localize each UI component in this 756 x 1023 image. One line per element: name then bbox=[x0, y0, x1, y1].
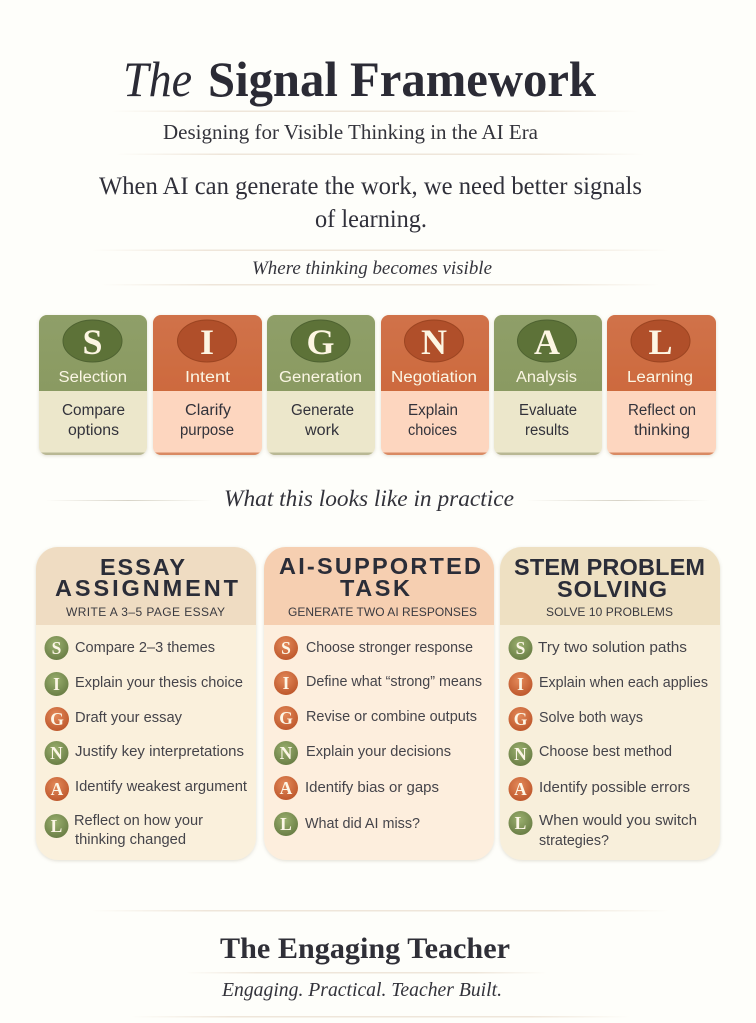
heading: STEM problem solving bbox=[514, 554, 705, 619]
list: AI task steps: G bbox=[279, 708, 293, 728]
list: AI task steps bbox=[274, 636, 482, 836]
title: The bbox=[123, 51, 192, 107]
list: essay steps: N bbox=[50, 743, 63, 763]
heading: STEM problem solving: STEM PROBLEM bbox=[514, 554, 705, 580]
list: AI task steps: Identify bias or gaps bbox=[305, 780, 439, 796]
panel: AI-supported task bbox=[264, 547, 494, 860]
list: STEM steps: When would you switch bbox=[539, 813, 697, 829]
headline statement bbox=[99, 173, 642, 233]
list: AI task steps: I bbox=[283, 673, 290, 693]
list: STEM steps: Solve both ways bbox=[539, 710, 643, 726]
card: Negotiation bbox=[381, 315, 489, 456]
list: STEM steps: L bbox=[515, 813, 526, 833]
headline statement: When AI can generate the work, we need better signals bbox=[99, 173, 642, 200]
heading: AI-supported task: TASK bbox=[340, 575, 410, 601]
heading: AI-supported task: AI-SUPPORTED bbox=[279, 553, 481, 579]
list: AI task steps: Revise or combine outputs bbox=[306, 709, 477, 725]
list: AI task steps: Choose stronger response bbox=[306, 640, 473, 656]
card: Intent bbox=[153, 315, 262, 456]
list: essay steps: Identify weakest argument bbox=[75, 779, 247, 795]
card: Learning: thinking bbox=[634, 422, 690, 439]
title: Signal Framework bbox=[208, 51, 596, 107]
list: STEM steps: Try two solution paths bbox=[538, 640, 687, 656]
card: Selection: Compare bbox=[62, 402, 125, 419]
list: AI task steps: A bbox=[280, 778, 293, 798]
tagline: Where thinking becomes visible bbox=[252, 258, 492, 279]
list: STEM steps: I bbox=[517, 674, 524, 694]
list: STEM steps: Identify possible errors bbox=[539, 780, 690, 796]
card: Selection: S bbox=[82, 322, 103, 362]
list: STEM steps: strategies? bbox=[539, 833, 609, 849]
heading: AI-supported task: GENERATE TWO AI RESPONSES bbox=[288, 605, 477, 619]
heading: essay assignment: WRITE A 3–5 PAGE ESSAY bbox=[66, 605, 225, 619]
list: STEM steps bbox=[508, 636, 708, 849]
list: essay steps: S bbox=[52, 638, 61, 658]
card: Negotiation: Explain bbox=[408, 402, 458, 419]
card: Selection: Selection bbox=[58, 369, 127, 386]
card: Generation bbox=[267, 315, 375, 456]
list: essay steps: Draft your essay bbox=[75, 710, 183, 726]
subtitle: Designing for Visible Thinking in the AI Era bbox=[163, 120, 539, 144]
heading: STEM problem solving: SOLVE 10 PROBLEMS bbox=[546, 605, 673, 619]
card: Generation: work bbox=[304, 422, 339, 439]
panel: essay assignment bbox=[36, 547, 256, 860]
list: AI task steps: S bbox=[281, 638, 291, 658]
list: essay steps bbox=[44, 636, 247, 848]
list: essay steps: I bbox=[53, 674, 60, 694]
card: Generation: Generation bbox=[279, 369, 362, 386]
card: Intent: Clarify bbox=[185, 402, 231, 419]
card: Negotiation: N bbox=[421, 322, 447, 362]
card: Learning: L bbox=[648, 322, 673, 362]
list: AI task steps: What did AI miss? bbox=[305, 816, 420, 832]
card: Analysis bbox=[494, 315, 602, 456]
card: Analysis: Analysis bbox=[516, 369, 577, 386]
list: AI task steps: Define what “strong” means bbox=[306, 674, 482, 690]
section heading: What this looks like in practice bbox=[224, 486, 514, 511]
heading: essay assignment bbox=[55, 554, 239, 619]
list: STEM steps: A bbox=[514, 779, 527, 799]
heading: essay assignment: ASSIGNMENT bbox=[55, 575, 239, 601]
list: STEM steps: S bbox=[516, 638, 525, 658]
footer tagline: Engaging. Practical. Teacher Built. bbox=[221, 979, 502, 1001]
card: Selection bbox=[39, 315, 147, 456]
list: AI task steps: L bbox=[280, 814, 292, 834]
card: Learning bbox=[607, 315, 716, 456]
list: essay steps: L bbox=[51, 816, 62, 836]
list: STEM steps: N bbox=[514, 744, 527, 764]
card: Analysis: Evaluate bbox=[519, 402, 577, 419]
card: Negotiation: choices bbox=[408, 422, 457, 439]
card: Analysis: A bbox=[534, 322, 560, 362]
card: Learning: Reflect on bbox=[628, 402, 696, 419]
card: Learning: Learning bbox=[627, 369, 693, 386]
card: Intent: I bbox=[200, 322, 214, 362]
list: AI task steps: Explain your decisions bbox=[306, 744, 451, 760]
list: essay steps: thinking changed bbox=[75, 832, 186, 848]
list: STEM steps: Choose best method bbox=[539, 744, 672, 760]
card: Intent: Intent bbox=[185, 369, 231, 386]
list: essay steps: Explain your thesis choice bbox=[75, 675, 243, 691]
card: Analysis: results bbox=[525, 422, 569, 439]
card: Selection: options bbox=[68, 422, 119, 439]
card: Intent: purpose bbox=[180, 422, 234, 439]
list: STEM steps: Explain when each applies bbox=[539, 675, 708, 691]
list: STEM steps: G bbox=[514, 709, 528, 729]
list: essay steps: G bbox=[50, 709, 64, 729]
heading: essay assignment: ESSAY bbox=[100, 554, 185, 580]
card: Negotiation: Negotiation bbox=[391, 369, 477, 386]
list: AI task steps: N bbox=[280, 743, 293, 763]
list: essay steps: A bbox=[51, 779, 64, 799]
heading: AI-supported task bbox=[279, 553, 481, 619]
heading: STEM problem solving: SOLVING bbox=[557, 576, 667, 602]
list: essay steps: Justify key interpretations bbox=[75, 744, 244, 760]
card: Generation: G bbox=[306, 322, 335, 362]
headline statement: of learning. bbox=[315, 206, 427, 233]
list: essay steps: Compare 2–3 themes bbox=[75, 640, 215, 656]
footer brand: The Engaging Teacher bbox=[220, 932, 510, 965]
panel: SIGNAL cards bbox=[39, 315, 716, 456]
card: Generation: Generate bbox=[291, 402, 354, 419]
panel: STEM problem solving bbox=[500, 547, 720, 860]
list: essay steps: Reflect on how your bbox=[74, 813, 203, 829]
